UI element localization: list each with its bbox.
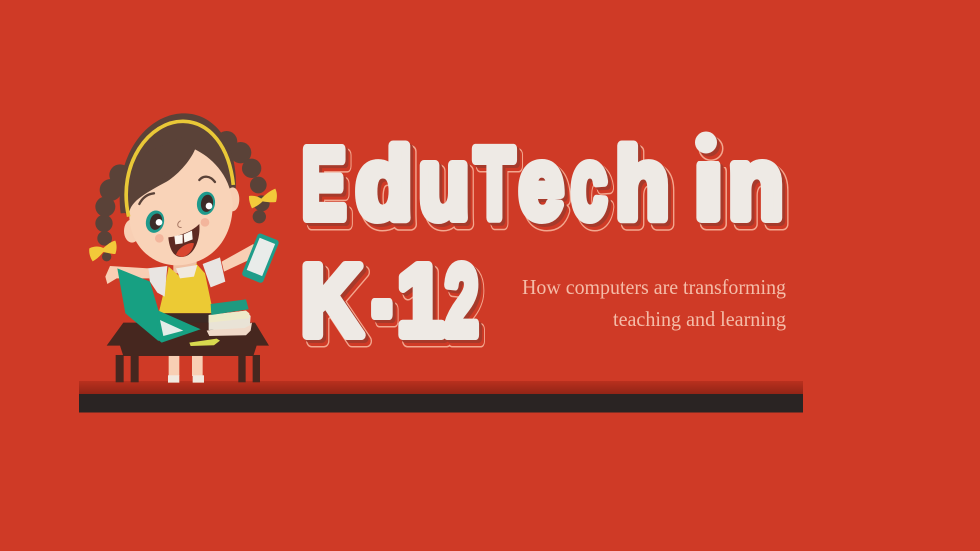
title: EduTech in: d — [356, 128, 412, 240]
title: EduTech in: u — [424, 134, 474, 246]
title: EduTech in: e — [522, 131, 566, 243]
title: K-12: K — [301, 245, 362, 357]
title: EduTech in: u — [422, 131, 472, 243]
title: EduTech in: u — [419, 128, 469, 240]
cheeks — [155, 218, 209, 243]
title: K-12: K — [306, 251, 367, 363]
title: EduTech in: T — [479, 134, 520, 246]
eye: right — [195, 190, 217, 216]
legs — [168, 356, 204, 383]
title: K-12: 2 — [450, 251, 483, 363]
title: K-12: K — [306, 251, 367, 363]
title: EduTech in: h — [616, 128, 669, 240]
title: EduTech in: d — [361, 134, 417, 246]
phone — [241, 233, 280, 284]
title: EduTech in: h — [618, 131, 672, 243]
title: EduTech in: T — [474, 128, 514, 240]
title: K-12: - — [372, 245, 392, 357]
arm: left — [105, 266, 150, 284]
title: EduTech in: i — [699, 134, 728, 246]
nose — [178, 221, 182, 227]
headband — [126, 121, 233, 217]
collar — [176, 265, 197, 278]
braid: left — [95, 164, 131, 261]
laptop — [117, 268, 201, 343]
braid: right — [216, 131, 270, 223]
books — [207, 299, 252, 336]
title: EduTech in — [302, 132, 788, 232]
title: EduTech in: E — [307, 134, 351, 246]
title: EduTech in: i — [697, 131, 726, 243]
title: K-12: 1 — [402, 251, 449, 363]
pencil — [189, 339, 220, 346]
bow: left — [89, 241, 117, 261]
subtitle — [522, 275, 786, 331]
title: K-12 — [301, 245, 483, 363]
eye: left — [143, 208, 167, 235]
title: K-12: - — [375, 248, 395, 360]
title: EduTech in: T — [479, 134, 520, 246]
title: EduTech in: h — [620, 134, 674, 246]
title: K-12: 1 — [397, 245, 444, 357]
title: K-12: K — [304, 248, 365, 360]
title: K-12: - — [377, 251, 397, 363]
title: K-12: 1 — [400, 248, 447, 360]
hair — [120, 113, 236, 213]
eyebrow: left — [139, 193, 154, 204]
title: EduTech in: n — [733, 134, 788, 246]
title: EduTech in: d — [361, 134, 417, 246]
title: EduTech in: n — [733, 134, 788, 246]
title: EduTech in: E — [302, 128, 346, 240]
neck — [173, 257, 197, 273]
title: EduTech in: u — [424, 134, 474, 246]
subtitle: teaching and learning — [613, 307, 786, 331]
hair fringe edge — [125, 137, 195, 217]
ear: left — [124, 219, 140, 243]
floor bar — [79, 381, 803, 412]
title: EduTech in: n — [728, 128, 783, 240]
bow: right — [249, 189, 277, 208]
table — [107, 323, 269, 382]
title: EduTech in: i — [694, 128, 723, 240]
title: EduTech in: e — [524, 134, 568, 246]
skirt — [159, 313, 213, 333]
title: EduTech in: c — [576, 134, 612, 246]
title: K-12: 2 — [448, 248, 481, 360]
title: EduTech in: i — [699, 134, 728, 246]
mouth — [168, 224, 199, 257]
title: EduTech in: d — [359, 131, 415, 243]
title: EduTech in: e — [524, 134, 568, 246]
dress — [159, 263, 213, 313]
title: EduTech in: c — [574, 131, 610, 243]
title: EduTech in: e — [519, 128, 564, 240]
subtitle: How computers are transforming — [522, 275, 786, 299]
title: EduTech in: T — [477, 131, 518, 243]
sleeve: right — [203, 257, 225, 287]
ear: right — [226, 187, 239, 211]
sleeve: left — [147, 266, 167, 297]
illustration: girl at desk — [89, 113, 280, 383]
arm: right — [222, 244, 257, 272]
title: K-12: 2 — [445, 245, 478, 357]
title: EduTech in: n — [731, 131, 786, 243]
title: EduTech in: c — [571, 128, 607, 240]
title: EduTech in: E — [305, 131, 349, 243]
title: K-12: 2 — [450, 251, 483, 363]
title: K-12: 1 — [402, 251, 449, 363]
title: EduTech in: h — [620, 134, 674, 246]
title: EduTech in: c — [576, 134, 612, 246]
title: EduTech in: E — [307, 134, 351, 246]
eyebrow: right — [199, 177, 215, 182]
face — [129, 149, 233, 265]
title: K-12: - — [377, 251, 397, 363]
